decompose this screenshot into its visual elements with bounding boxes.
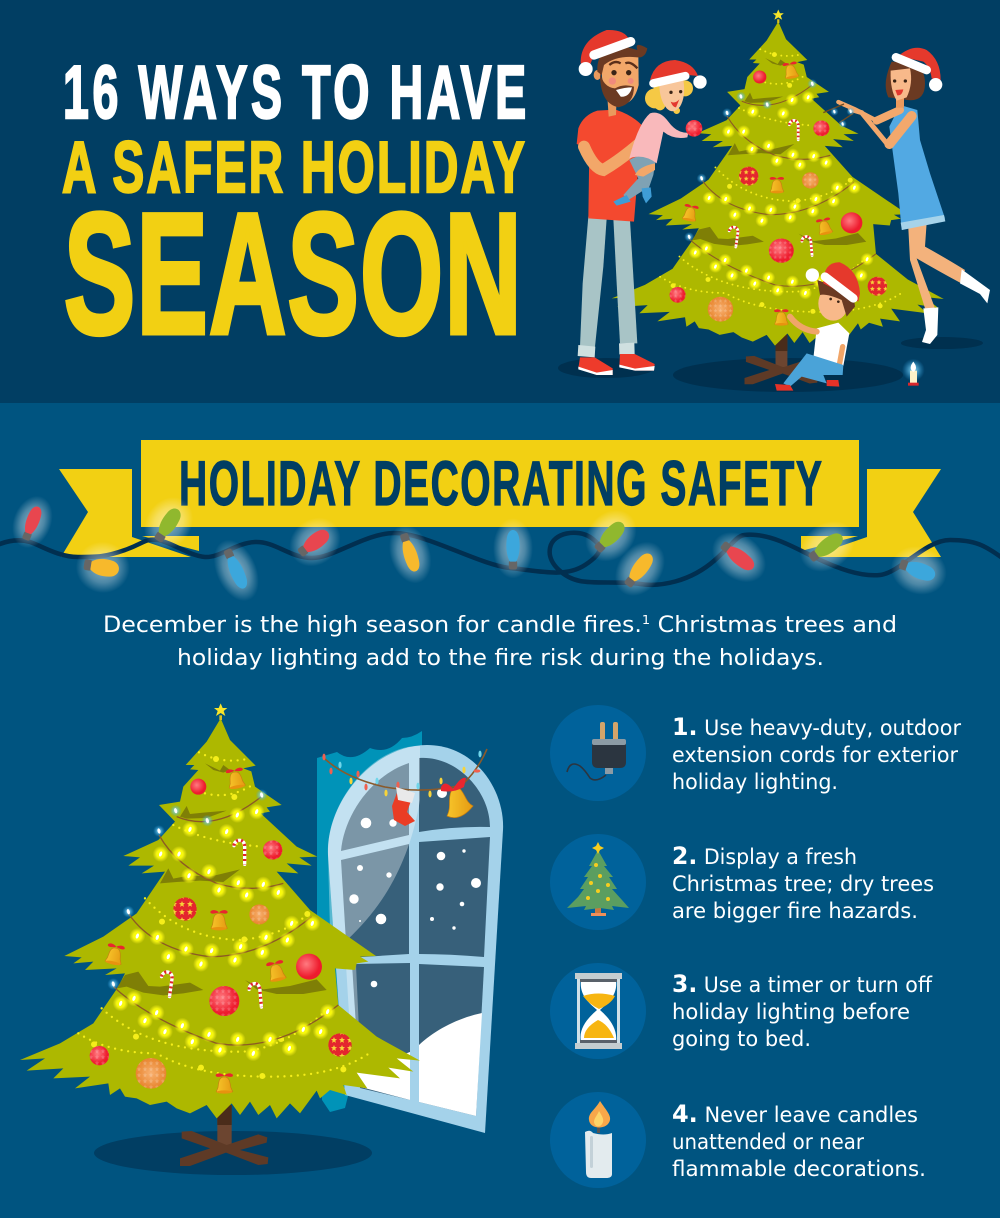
shadow under Christmas tree — [94, 1131, 372, 1175]
tip 4 text: flammable decorations. — [672, 1157, 926, 1181]
mum — [823, 48, 990, 349]
tip 2 text: 2. Display a fresh — [672, 842, 857, 870]
ribbon heading: HOLIDAY DECORATING SAFETY — [179, 450, 822, 519]
intro text: 1 — [642, 613, 650, 627]
icon: candle — [550, 1092, 646, 1188]
icon: plug — [550, 705, 646, 801]
icon: hourglass — [550, 963, 646, 1059]
window panes — [341, 758, 490, 1116]
illustration: family decorating Christmas tree — [558, 10, 990, 392]
window frame — [328, 745, 503, 1133]
tip 4 text — [672, 1100, 926, 1181]
tip 1 text: extension cords for exterior — [672, 743, 958, 767]
intro text: holiday lighting add to the fire risk during the holidays. — [177, 646, 824, 671]
title: 16 WAYS TO HAVE — [63, 52, 526, 135]
tip 1 text: 1. Use heavy-duty, outdoor — [672, 713, 961, 741]
intro text — [103, 613, 897, 671]
tree — [612, 10, 944, 384]
boy — [775, 262, 860, 391]
glass reflection — [328, 746, 420, 1030]
dad — [577, 30, 655, 375]
tip 3 text — [672, 970, 933, 1051]
ribbon tails — [59, 469, 191, 557]
illustration: open window with snow — [317, 731, 503, 1133]
string of coloured lights — [0, 488, 1000, 608]
tip 4 text: 4. Never leave candles — [672, 1100, 918, 1128]
small candle — [902, 359, 925, 386]
snowflakes — [349, 788, 481, 987]
floor shadows — [558, 337, 983, 392]
tip 2 text — [672, 842, 934, 923]
ribbon panel — [141, 440, 859, 527]
tip 2 text: Christmas tree; dry trees — [672, 872, 934, 896]
large decorated Christmas tree — [20, 703, 420, 1166]
title — [62, 52, 526, 370]
tip 3 text: holiday lighting before — [672, 1000, 910, 1024]
title: SEASON — [64, 178, 522, 370]
tip 3 text: going to bed. — [672, 1027, 811, 1051]
tip 4 text: unattended or near — [672, 1130, 864, 1154]
figures drawn in enlarged coordinates — [577, 30, 990, 391]
curtain — [317, 731, 422, 1112]
girl — [613, 60, 707, 206]
tip 2 text: are bigger fire hazards. — [672, 899, 918, 923]
tip 1 text — [672, 713, 961, 794]
tip 3 text: 3. Use a timer or turn off — [672, 970, 933, 998]
main background panel — [0, 403, 1000, 1218]
ribbon banner — [59, 440, 941, 557]
intro text: Christmas trees and — [650, 613, 897, 638]
snow drifts — [353, 1013, 482, 1116]
intro text: December is the high season for candle fires. — [103, 613, 603, 638]
icon: small Christmas tree — [550, 834, 646, 930]
tip 1 text: holiday lighting. — [672, 770, 838, 794]
title: A SAFER HOLIDAY — [62, 127, 525, 207]
header background panel — [0, 0, 1000, 403]
garland with stocking and bell — [322, 749, 487, 826]
